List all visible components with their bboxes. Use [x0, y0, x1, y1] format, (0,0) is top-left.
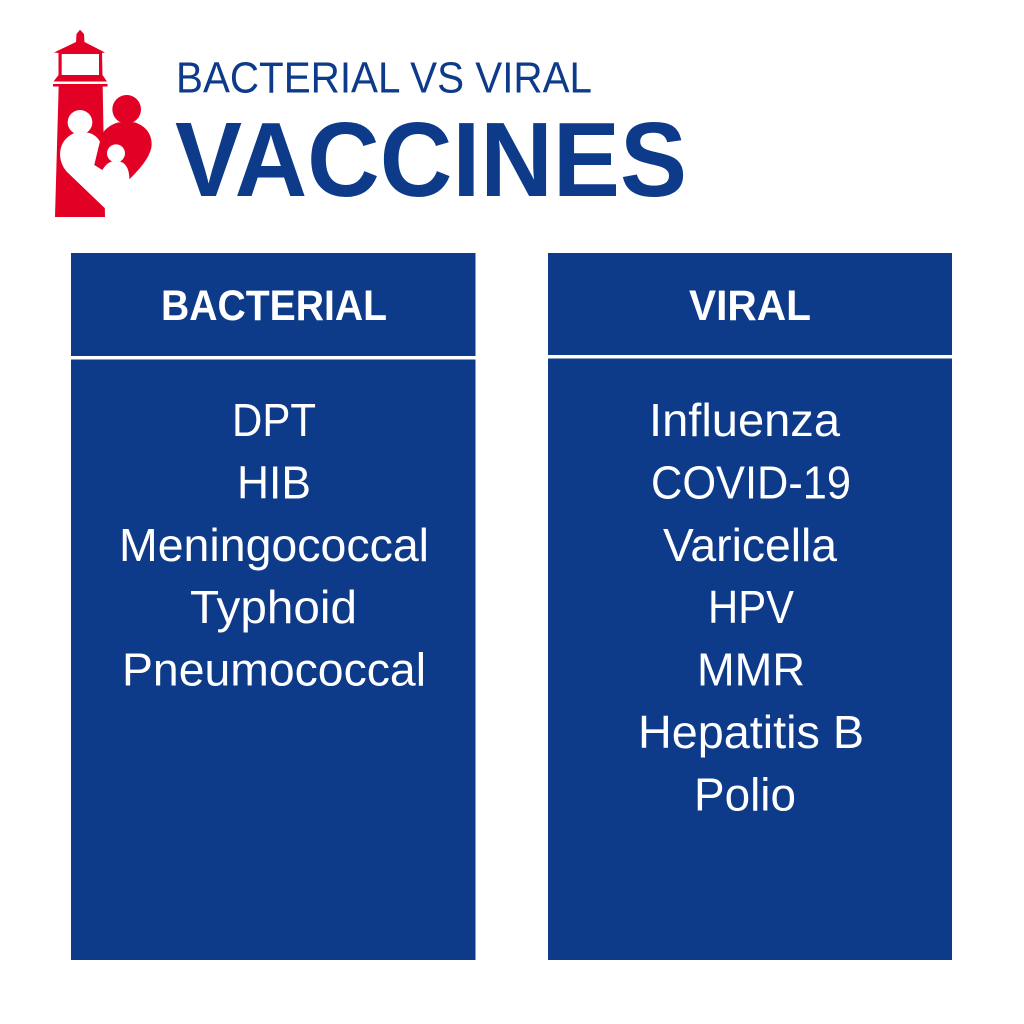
list: viral vaccines: MMR [697, 644, 805, 696]
subtitle: BACTERIAL VS VIRAL [176, 54, 592, 102]
list: viral vaccines: COVID-19 [651, 456, 851, 508]
title: VACCINES [175, 101, 687, 219]
list: viral vaccines: Polio [694, 768, 796, 820]
list: viral vaccines: Hepatitis B [638, 706, 864, 758]
panel: viral [548, 253, 952, 960]
icon: lighthouse and family logo [53, 30, 152, 217]
list: bacterial vaccines: Meningococcal [119, 519, 429, 571]
list: bacterial vaccines [119, 394, 429, 696]
panel: bacterial [71, 253, 476, 960]
list: viral vaccines [638, 394, 864, 820]
list: viral vaccines: Varicella [663, 519, 837, 571]
list: bacterial vaccines: Pneumococcal [122, 644, 426, 696]
heading: bacterial: BACTERIAL [161, 282, 387, 330]
list: bacterial vaccines: DPT [232, 394, 316, 446]
list: bacterial vaccines: Typhoid [190, 581, 357, 633]
list: viral vaccines: HPV [708, 581, 794, 633]
list: viral vaccines: Influenza [649, 394, 840, 446]
heading: viral: VIRAL [689, 282, 811, 330]
list: bacterial vaccines: HIB [237, 456, 311, 508]
